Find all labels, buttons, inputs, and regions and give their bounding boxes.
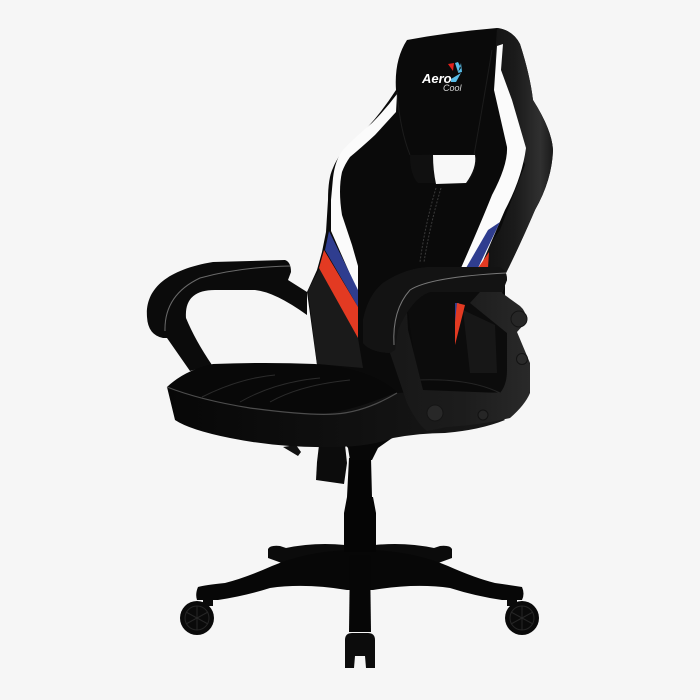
left white stripe — [331, 94, 397, 292]
side base legs — [196, 550, 523, 600]
centre stitching — [420, 188, 441, 262]
tilt lever — [283, 445, 301, 456]
right white stripe — [461, 44, 526, 268]
headrest seams — [397, 50, 492, 155]
logo red shard — [448, 63, 454, 71]
seat — [167, 363, 505, 447]
arm front bolt — [427, 405, 443, 421]
front caster — [345, 633, 375, 668]
logo blue shards — [451, 62, 462, 82]
backrest shell — [307, 28, 553, 400]
logo wordmark: Aero — [421, 71, 452, 86]
right caster — [505, 600, 539, 635]
right arm frame — [363, 267, 530, 431]
dark back behind armrest — [405, 292, 512, 398]
seat mechanism — [340, 436, 395, 460]
left red stripe — [319, 250, 358, 338]
view through right armrest — [405, 292, 512, 398]
red stripe behind armrest — [455, 303, 465, 345]
mesh panel behind armrest — [463, 310, 497, 373]
arm lower bolt — [478, 410, 488, 420]
logo sub-wordmark: Cool — [443, 83, 463, 93]
blue stripe behind armrest — [455, 303, 459, 322]
left arm stitching — [165, 266, 290, 331]
seat cushion side — [167, 387, 505, 447]
backrest — [307, 28, 553, 400]
right armrest — [363, 267, 530, 431]
seat top — [167, 363, 397, 414]
gas lift cylinder — [344, 458, 376, 552]
right red stripe — [478, 252, 489, 268]
rear base legs — [268, 544, 452, 566]
height adjustment knob — [316, 445, 347, 484]
right blue stripe — [466, 222, 500, 268]
seat behind armrest — [417, 380, 500, 396]
seat piping — [167, 387, 397, 414]
left caster — [180, 600, 214, 635]
left armrest — [147, 260, 307, 371]
left lower leather panel — [308, 268, 363, 368]
arm side bolt — [516, 354, 528, 364]
seat stitching — [202, 375, 350, 402]
front base leg — [349, 555, 371, 632]
headrest slot — [410, 154, 476, 184]
left arm shape — [147, 260, 307, 371]
right side leather — [470, 28, 553, 275]
right arm stitching — [394, 273, 506, 345]
left blue stripe — [325, 231, 358, 307]
base — [180, 458, 539, 668]
right arm pad — [363, 267, 507, 353]
arm pivot bolt — [511, 311, 527, 327]
logo — [421, 62, 463, 93]
